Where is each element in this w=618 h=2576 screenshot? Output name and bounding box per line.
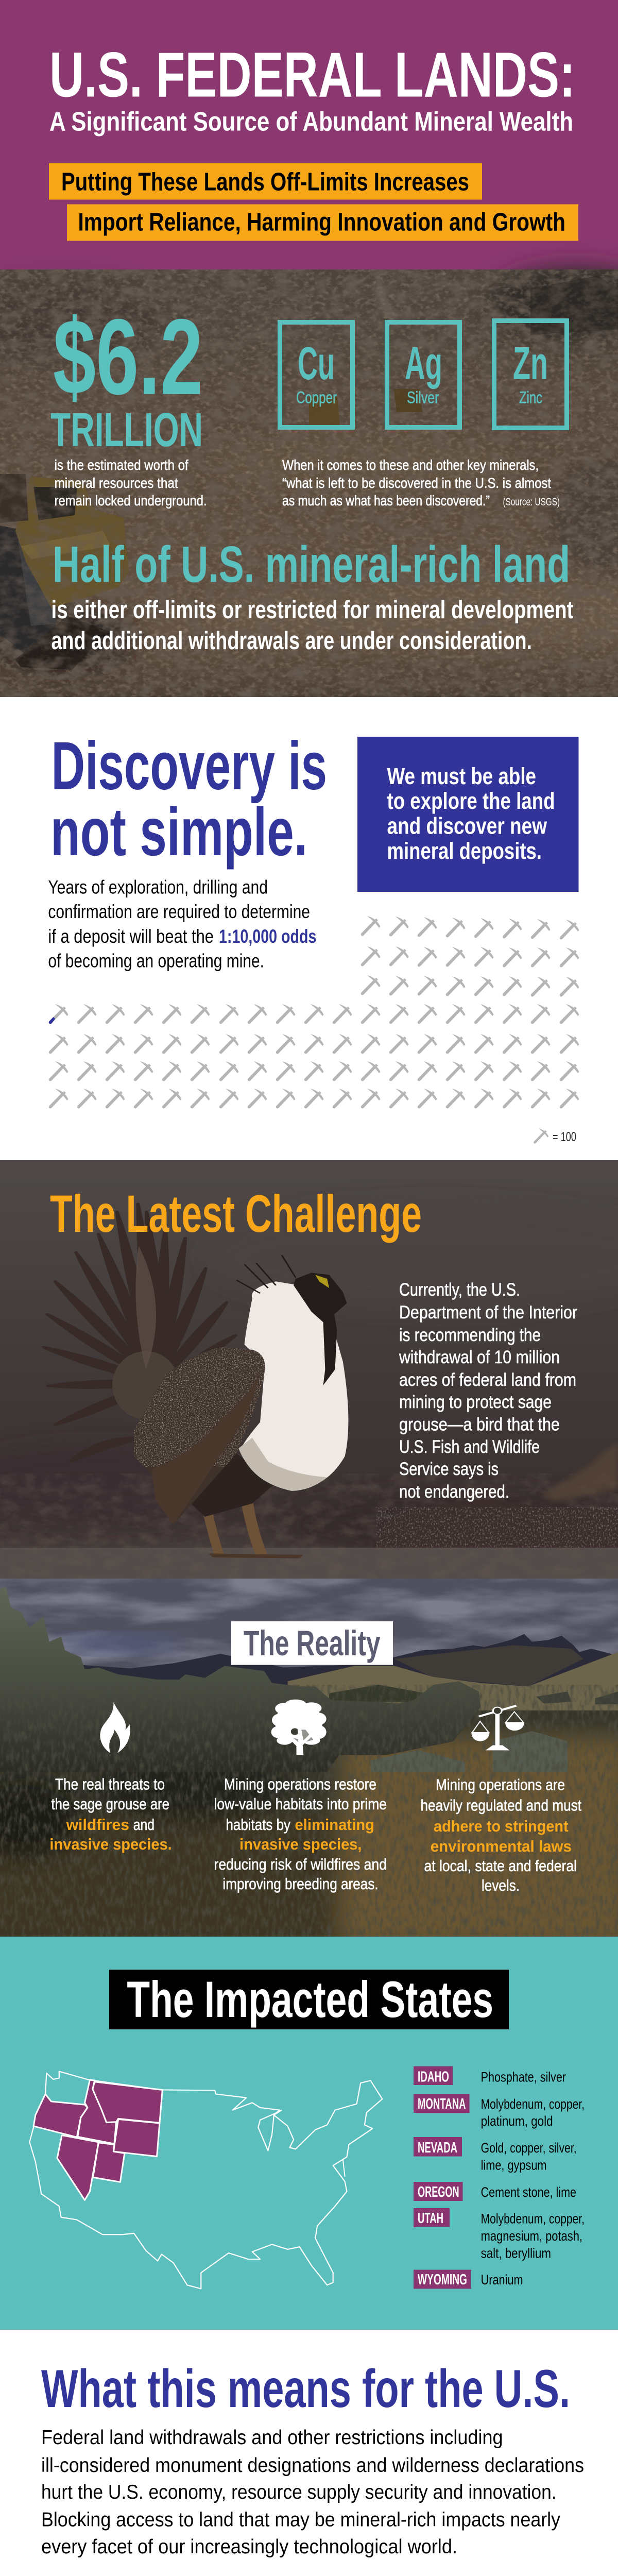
photo: bulldozers xyxy=(0,276,618,670)
text: interior recommendation: acres of federal land from xyxy=(399,1370,576,1390)
text: interior recommendation: Service says is xyxy=(399,1459,499,1479)
pictogram: pick icons, 1 in 10,000 xyxy=(49,916,579,1108)
text column: real threats: invasive species. xyxy=(49,1835,172,1853)
legend: Montana: MONTANA xyxy=(418,2096,466,2112)
text column: habitat restoration: eliminating xyxy=(295,1816,374,1834)
text column: real threats: and xyxy=(133,1816,154,1834)
banner line 1 xyxy=(49,163,482,200)
legend: Montana: Molybdenum, copper, xyxy=(481,2096,585,2112)
text column: habitat restoration: low-value habitats into prime xyxy=(214,1795,387,1813)
text: impact paragraph: ill-considered monument designations and wilderness declarations xyxy=(41,2454,584,2477)
stat: $6.2 trillion xyxy=(50,297,203,456)
text column: real threats xyxy=(49,1775,172,1853)
callout: explore the land: to explore the land xyxy=(387,788,555,814)
legend: Nevada: Gold, copper, silver, xyxy=(481,2140,577,2156)
legend: Idaho xyxy=(414,2066,566,2086)
heading: discovery is not simple: Discovery is xyxy=(52,728,327,804)
legend: Oregon: OREGON xyxy=(418,2184,459,2200)
element: zinc xyxy=(494,320,566,428)
heading: discovery is not simple xyxy=(50,728,327,870)
text: exploration paragraph: 1:10,000 odds xyxy=(219,926,316,947)
photo: sagebrush backdrop xyxy=(0,1206,618,1579)
text column: real threats: wildfires xyxy=(66,1816,129,1834)
panel: mineral wealth photo xyxy=(0,268,618,697)
text: interior recommendation: is recommending the xyxy=(399,1325,541,1345)
text: exploration paragraph: of becoming an operating mine. xyxy=(48,951,264,972)
legend: Montana: platinum, gold xyxy=(481,2113,553,2129)
photo: sage grouse xyxy=(43,1204,348,1558)
text: interior recommendation: Currently, the U.S. xyxy=(399,1280,520,1300)
element: zinc: Zinc xyxy=(519,388,542,407)
text: off-limits statement xyxy=(52,596,574,655)
banner line 1: Putting These Lands Off-Limits Increases xyxy=(61,168,469,196)
text: interior recommendation xyxy=(399,1280,577,1502)
text column: habitat restoration: invasive species, xyxy=(239,1835,362,1853)
text: exploration paragraph xyxy=(48,877,316,972)
state: Idaho xyxy=(78,2080,116,2144)
label: the reality: The Reality xyxy=(244,1623,380,1663)
icon: flame xyxy=(100,1702,130,1753)
legend: Utah: UTAH xyxy=(418,2210,443,2227)
panel: header xyxy=(0,0,618,269)
panel: what this means xyxy=(0,2330,618,2576)
text column: habitat restoration: Mining operations restore xyxy=(224,1775,376,1793)
text: exploration paragraph: Years of exploration, drilling and xyxy=(48,877,268,897)
text column: regulation: environmental laws xyxy=(431,1837,572,1855)
icon: tree xyxy=(271,1700,327,1755)
text column: habitat restoration: improving breeding areas. xyxy=(222,1875,379,1893)
panel: the reality xyxy=(0,1579,618,1947)
element: silver xyxy=(387,323,459,428)
text: worth of minerals xyxy=(55,457,207,509)
callout: explore the land: We must be able xyxy=(387,763,536,789)
element: copper xyxy=(280,323,352,428)
map: United States with impacted states xyxy=(29,2072,382,2289)
legend: Wyoming xyxy=(414,2270,523,2289)
icon: scales of justice xyxy=(471,1706,524,1750)
text column: regulation: at local, state and federal xyxy=(424,1857,577,1875)
legend: Idaho: Phosphate, silver xyxy=(481,2070,566,2085)
legend: Nevada xyxy=(414,2137,577,2173)
panel: discovery xyxy=(0,697,618,1160)
text column: regulation: Mining operations are xyxy=(436,1776,565,1794)
text: interior recommendation: U.S. Fish and Wildlife xyxy=(399,1437,540,1457)
text: interior recommendation: withdrawal of 10 million xyxy=(399,1347,560,1367)
legend: Wyoming: Uranium xyxy=(481,2272,523,2287)
stat: $6.2 trillion: $6.2 xyxy=(53,297,203,417)
legend: Utah: magnesium, potash, xyxy=(481,2228,582,2244)
text: worth of minerals: is the estimated worth of xyxy=(55,457,188,473)
text: impact paragraph: Federal land withdrawals and other restrictions including xyxy=(41,2427,503,2449)
text: USGS quote xyxy=(282,457,560,509)
state: Utah xyxy=(93,2143,125,2182)
text: exploration paragraph: if a deposit will beat the xyxy=(48,926,214,947)
element: zinc: Zn xyxy=(513,338,548,389)
label: the reality xyxy=(231,1621,393,1665)
legend: one pick equals 100: = 100 xyxy=(553,1130,576,1144)
panel: the impacted states xyxy=(0,1937,618,2330)
legend: Nevada: lime, gypsum xyxy=(481,2157,547,2173)
legend: Oregon xyxy=(414,2182,576,2201)
legend: one pick equals 100 xyxy=(534,1128,576,1144)
text: interior recommendation: grouse—a bird that the xyxy=(399,1415,560,1434)
text: USGS quote: “what is left to be discovered in the U.S. is almost xyxy=(282,475,551,491)
text column: habitat restoration: habitats by xyxy=(226,1816,290,1834)
photo: sagebrush bushes xyxy=(0,1587,481,1772)
text column: regulation xyxy=(420,1776,581,1894)
legend: Wyoming: WYOMING xyxy=(418,2272,467,2288)
text column: habitat restoration xyxy=(214,1775,387,1893)
element: silver: Ag xyxy=(405,338,442,389)
text column: regulation: heavily regulated and must xyxy=(420,1797,581,1815)
text: USGS quote: as much as what has been discovered.” xyxy=(282,493,490,509)
callout: explore the land: mineral deposits. xyxy=(387,838,542,864)
text: exploration paragraph: confirmation are required to determine xyxy=(48,901,310,922)
legend: Utah: Molybdenum, copper, xyxy=(481,2211,585,2227)
text column: real threats: the sage grouse are xyxy=(52,1795,169,1813)
text column: real threats: The real threats to xyxy=(55,1775,165,1793)
state: Wyoming xyxy=(113,2119,160,2157)
legend: Oregon: Cement stone, lime xyxy=(481,2184,576,2200)
heading: the latest challenge: The Latest Challenge xyxy=(50,1184,422,1243)
text: impact paragraph: hurt the U.S. economy, resource supply security and innovation. xyxy=(41,2481,557,2503)
legend: Utah: salt, beryllium xyxy=(481,2246,551,2261)
text: interior recommendation: Department of the Interior xyxy=(399,1302,577,1323)
text column: habitat restoration: reducing risk of wildfires and xyxy=(214,1855,387,1873)
text: worth of minerals: mineral resources that xyxy=(55,475,178,491)
text: impact paragraph: Blocking access to land that may be mineral-rich impacts nearly xyxy=(41,2509,560,2531)
text: interior recommendation: mining to protect sage xyxy=(399,1392,552,1412)
state: Oregon xyxy=(33,2094,88,2137)
photo: sagebrush landscape xyxy=(0,1579,618,1947)
element: copper: Cu xyxy=(298,338,335,389)
text: USGS quote: (Source: USGS) xyxy=(503,496,560,508)
legend: Utah xyxy=(414,2208,585,2261)
callout: explore the land xyxy=(357,737,579,892)
heading: discovery is not simple: not simple. xyxy=(50,794,307,870)
text: impact paragraph: every facet of our increasingly technological world. xyxy=(41,2536,457,2558)
element: silver: Silver xyxy=(407,388,439,407)
text: interior recommendation: not endangered. xyxy=(399,1482,509,1502)
stat: $6.2 trillion: TRILLION xyxy=(50,403,203,456)
element: copper: Copper xyxy=(296,388,337,407)
legend: Idaho: IDAHO xyxy=(418,2069,449,2086)
photo: mine site background xyxy=(0,268,618,697)
callout: explore the land: and discover new xyxy=(387,813,547,839)
legend: Montana xyxy=(414,2094,585,2129)
text: USGS quote: When it comes to these and other key minerals, xyxy=(282,457,539,473)
state: Nevada xyxy=(57,2135,98,2200)
text: impact paragraph xyxy=(41,2427,584,2558)
state: Montana xyxy=(93,2082,162,2123)
legend: Nevada: NEVADA xyxy=(418,2140,457,2156)
text column: regulation: adhere to stringent xyxy=(434,1817,569,1835)
panel: the latest challenge xyxy=(0,1160,618,1579)
text: worth of minerals: remain locked underground. xyxy=(55,493,207,509)
heading: the impacted states: The Impacted States xyxy=(127,1971,493,2028)
text column: regulation: levels. xyxy=(482,1876,520,1894)
